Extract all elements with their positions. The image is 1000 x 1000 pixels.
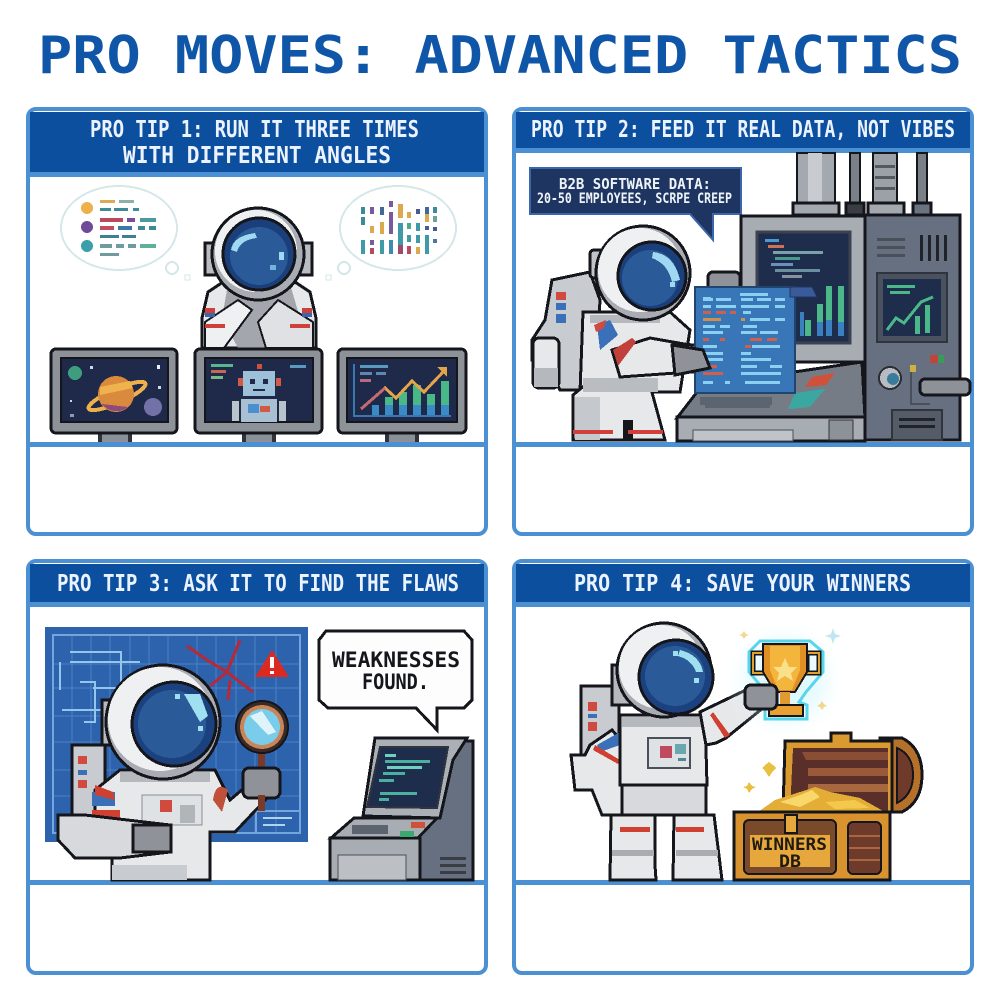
- computer terminal: [330, 738, 473, 880]
- heading: tip 1: PRO TIP 1: RUN IT THREE TIMES: [90, 117, 419, 143]
- heading: tip 4: PRO TIP 4: SAVE YOUR WINNERS: [574, 571, 911, 597]
- heading: tip 1: [90, 117, 419, 169]
- panel: pro tip 1: [28, 109, 486, 534]
- speech bubble: data: B2B SOFTWARE DATA:: [559, 175, 711, 193]
- chest label text: DB: [779, 852, 801, 872]
- speech bubble: data: 20-50 EMPLOYEES, SCRPE CREEP: [537, 191, 732, 207]
- panel: pro tip 4: [514, 561, 972, 973]
- blueprint with crack and warning: [45, 627, 308, 842]
- panel: pro tip 3: [28, 561, 486, 973]
- heading: tip 1: WITH DIFFERENT ANGLES: [123, 143, 391, 169]
- monitor: saturn: [51, 349, 177, 442]
- heading: tip 3: PRO TIP 3: ASK IT TO FIND THE FLAWS: [57, 571, 459, 597]
- chest label text: WINNERS: [752, 835, 827, 855]
- treasure chest: winners db: [734, 733, 922, 880]
- astronaut: holding data sheet: [532, 226, 817, 440]
- speech bubble: weaknesses found: FOUND.: [362, 670, 429, 694]
- astronaut: raising trophy: [571, 623, 763, 880]
- monitor: growth chart: [338, 349, 466, 442]
- speech bubble: data: [530, 168, 741, 240]
- astronaut: inspecting with magnifier: [58, 665, 288, 880]
- icon: glowing trophy: [723, 618, 847, 742]
- speech bubble: weaknesses found: WEAKNESSES: [332, 648, 460, 672]
- monitor: robot: [195, 349, 322, 442]
- astronaut: thinking: [202, 208, 316, 348]
- chest label text: [752, 835, 827, 872]
- panel: pro tip 2: [514, 109, 972, 534]
- title: PRO MOVES: ADVANCED TACTICS: [38, 26, 962, 86]
- thought bubble: chart: [326, 186, 456, 280]
- thought bubble: text list: [61, 186, 190, 280]
- speech bubble: weaknesses found: [319, 631, 472, 730]
- glove holding trophy: [745, 685, 777, 709]
- machine with screens and pipes: [677, 153, 970, 441]
